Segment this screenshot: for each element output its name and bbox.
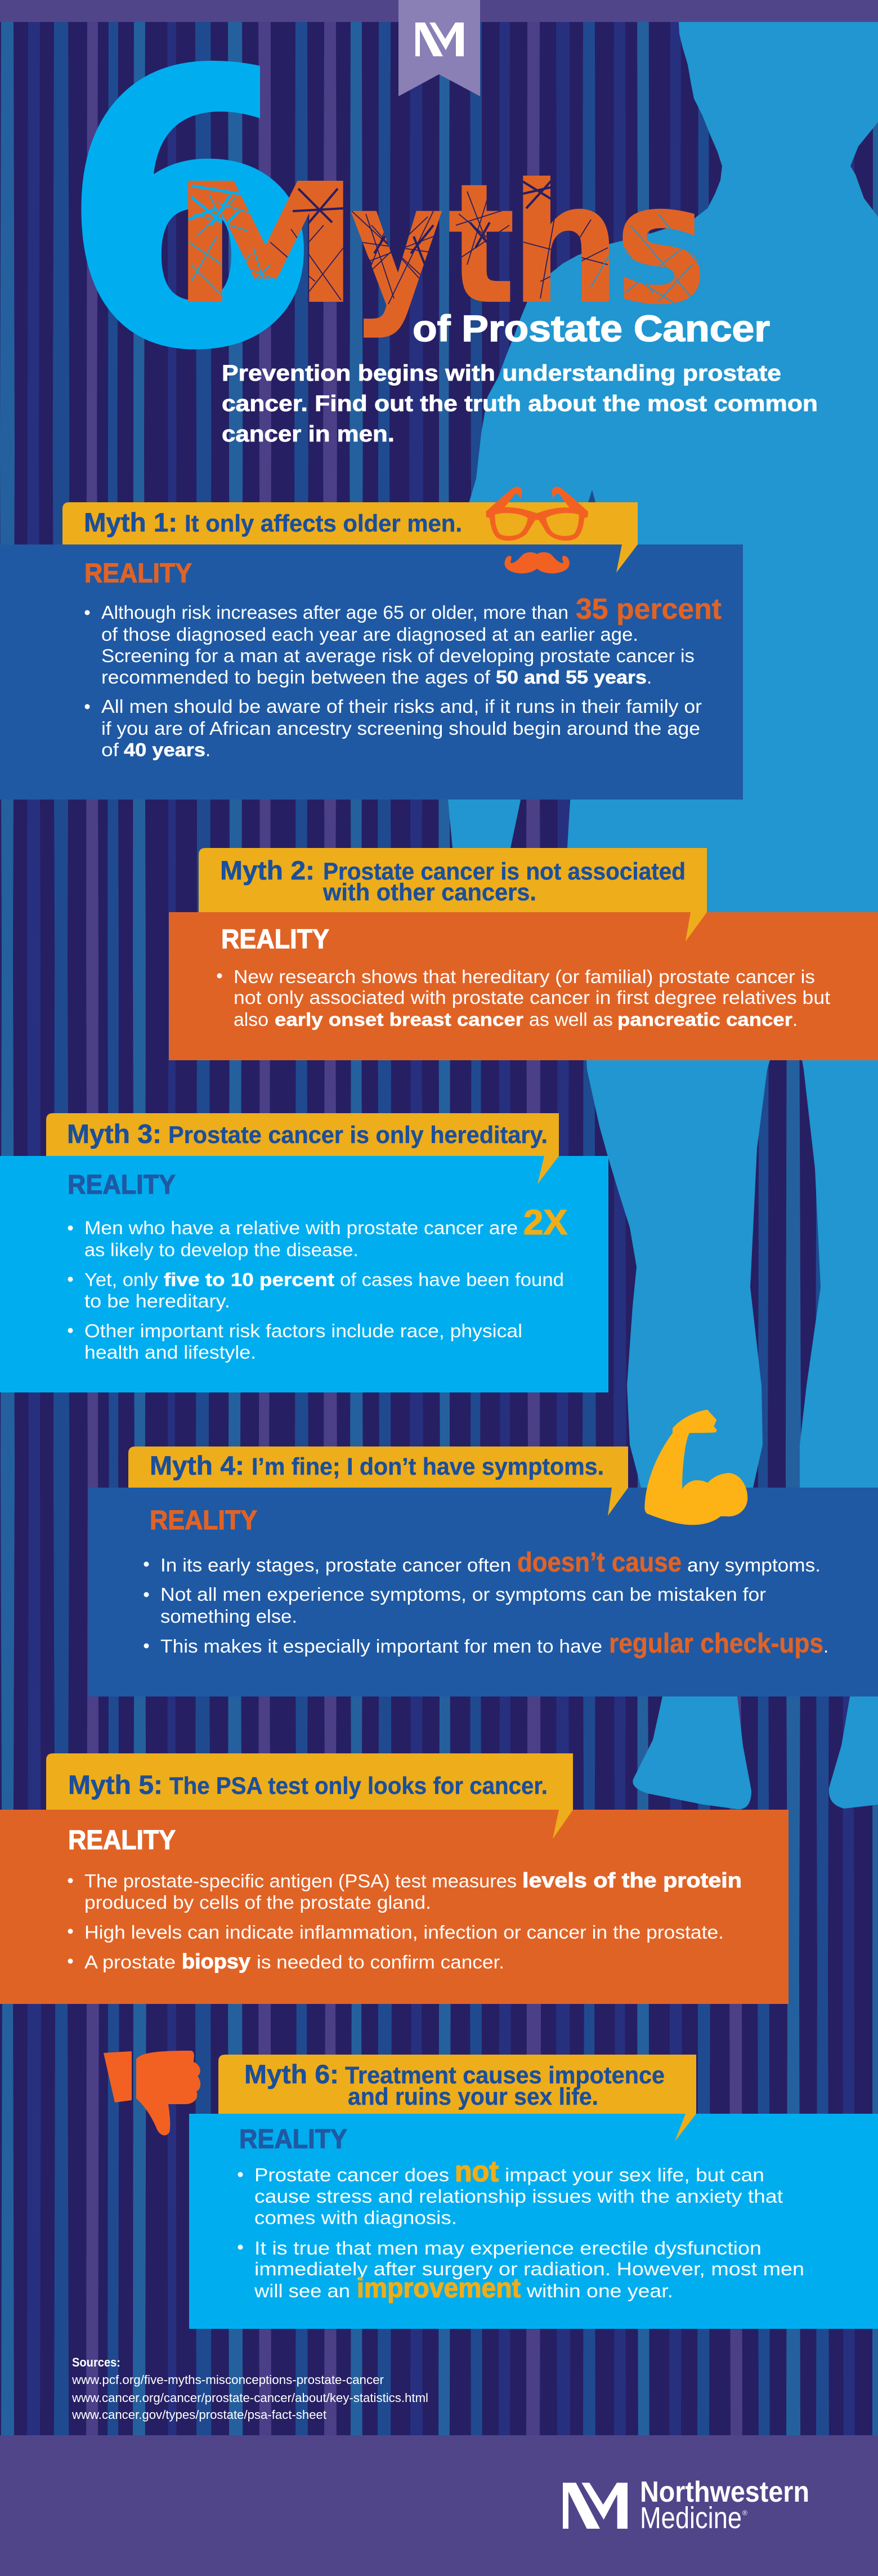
reality text 3: as likely to develop the disease. [84,1239,359,1260]
reality text 4: Not all men experience symptoms, or symptoms can be mistaken for [160,1584,766,1605]
reality text 3: health and lifestyle. [84,1342,256,1363]
sources: www.pcf.org/five-myths-misconceptions-prostate-cancer [71,2373,384,2387]
reality text 5 [68,1869,742,1973]
reality text 5: High levels can indicate inflammation, infection or cancer in the prostate. [84,1922,724,1943]
reality text 5: produced by cells of the prostate gland. [84,1892,431,1913]
myth 5 banner [46,1753,573,1839]
panel: myth 1 [0,486,743,800]
logo wordmark: Medicine [640,2501,742,2535]
reality text 4 [144,1547,828,1659]
title word Myths: s [615,148,707,341]
reality text 6: will see an [254,2280,350,2301]
title word Myths: y [349,148,445,341]
reality text 2: also [234,1009,268,1030]
sources [71,2355,428,2422]
title word Myths [188,176,700,338]
reality text 1: 40 years [124,739,205,760]
myth 6 banner: and ruins your sex life. [348,2083,598,2110]
reality text 1: recommended to begin between the ages of [101,667,491,687]
icon: glasses [486,486,588,541]
reality text 1 [84,593,722,760]
reality text 6: impact your sex life, but can [505,2164,764,2185]
title word Myths: h [510,148,621,341]
sources: www.cancer.gov/types/prostate/psa-fact-sheet [71,2408,326,2422]
intro paragraph: cancer. Find out the truth about the most common [222,391,818,416]
logo mark [563,2483,628,2529]
reality text 4: This makes it especially important for men to have [160,1636,602,1657]
reality text 2: . [792,1009,798,1030]
reality text 2: early onset breast cancer [275,1009,523,1030]
intro paragraph: Prevention begins with understanding prostate [222,361,781,386]
icon: flexed arm [644,1409,747,1525]
reality text 3: Men who have a relative with prostate cancer are [84,1217,518,1238]
ribbon with logo [398,0,480,96]
myth 5 banner: Myth 5: [68,1770,163,1800]
myth 2 banner: with other cancers. [322,879,536,906]
reality box 1 [0,544,743,800]
myth 4 banner [128,1447,628,1516]
logo wordmark: ® [742,2509,747,2517]
myth 1 banner [62,502,638,573]
reality box 3 [0,1156,608,1392]
myth 3 banner: Prostate cancer is only hereditary. [168,1122,548,1149]
reality text 6: It is true that men may experience erectile dysfunction [254,2238,761,2258]
intro paragraph: cancer in men. [222,422,395,447]
top bar [0,0,878,22]
reality heading 1: REALITY [84,559,192,588]
myth 1 banner: It only affects older men. [185,510,462,537]
reality heading 4: REALITY [150,1506,257,1535]
reality heading 6: REALITY [239,2124,347,2154]
panel: myth 2 [169,848,878,1060]
reality text 4: something else. [160,1606,297,1627]
reality text 1: Screening for a man at average risk of developing prostate cancer is [101,645,695,666]
myth 6 banner: Treatment causes impotence [345,2062,665,2089]
reality text 1: Although risk increases after age 65 or older, more than [101,602,568,623]
reality text 1: if you are of African ancestry screening should begin around the age [101,718,700,739]
reality text 5: The prostate-specific antigen (PSA) test measures [84,1870,517,1891]
reality text 1: . [205,739,210,760]
reality text 4: . [823,1636,828,1657]
reality text 1: 35 percent [576,593,722,626]
reality text 4: regular check-ups [609,1628,823,1659]
reality text 3 [68,1203,567,1363]
reality text 3: to be hereditary. [84,1291,230,1311]
myth 3 banner: Myth 3: [67,1119,162,1149]
reality text 1: . [647,667,652,687]
reality text 6 [238,2155,804,2303]
reality text 3: of cases have been found [340,1269,564,1290]
reality text 3: Yet, only [84,1269,159,1290]
reality text 5: biopsy [182,1950,250,1973]
footer bar [0,2435,878,2576]
reality text 6: cause stress and relationship issues with the anxiety that [254,2186,783,2207]
footer logo [563,2476,809,2535]
reality heading 2: REALITY [221,925,329,954]
big number 6: 6 [60,0,322,431]
reality text 6: Prostate cancer does [254,2164,449,2185]
myth 4 banner: Myth 4: [150,1450,244,1480]
myth 1 banner: Myth 1: [84,507,177,537]
reality text 1: of those diagnosed each year are diagnosed at an earlier age. [101,624,638,645]
icon: thumbs down [104,2051,200,2135]
myth 5 banner: The PSA test only looks for cancer. [169,1773,548,1800]
reality box 4 [88,1488,878,1697]
reality box 6 [189,2114,878,2329]
reality text 1: of [101,739,119,760]
title word Myths: M [171,148,361,341]
reality text 4: In its early stages, prostate cancer often [160,1555,511,1575]
sources: www.cancer.org/cancer/prostate-cancer/about/key-statistics.html [71,2391,428,2405]
myth 2 banner [199,848,707,941]
subtitle: of Prostate Cancer [413,307,770,349]
reality text 5: A prostate [84,1952,176,1972]
reality text 4: any symptoms. [687,1555,821,1575]
reality text 6: not [455,2155,499,2188]
myth 2 banner: Myth 2: [220,855,315,885]
title word Myths: t [447,148,516,341]
reality text 3: five to 10 percent [164,1269,334,1290]
reality text 5: levels of the protein [522,1869,742,1892]
intro paragraph [222,361,818,447]
reality text 2: as well as [529,1009,613,1030]
reality heading 3: REALITY [68,1170,176,1200]
reality text 6: within one year. [526,2280,673,2301]
myth 2 banner: Prostate cancer is not associated [323,858,686,885]
reality text 2: pancreatic cancer [617,1009,792,1030]
reality box 2 [169,912,878,1060]
panel: myth 3 [0,1113,608,1392]
logo wordmark: Northwestern [640,2476,809,2508]
myth 6 banner: Myth 6: [244,2059,339,2089]
panel: myth 4 [88,1409,878,1697]
reality text 5: is needed to confirm cancer. [257,1952,504,1972]
panel: myth 5 [0,1753,789,2004]
reality heading 5: REALITY [68,1825,176,1855]
reality text 6: immediately after surgery or radiation. However, most men [254,2258,804,2279]
reality text 4: doesn’t cause [517,1547,682,1578]
sources: Sources: [72,2355,120,2369]
reality text 1: All men should be aware of their risks and, if it runs in their family or [101,696,702,717]
logo wordmark [640,2476,809,2535]
myth 6 banner [218,2055,696,2141]
myth 4 banner: I’m fine; I don’t have symptoms. [252,1453,604,1480]
reality box 5 [0,1810,789,2004]
reality text 6: comes with diagnosis. [254,2207,457,2228]
panel: myth 6 [189,2055,878,2329]
myth 3 banner [46,1113,559,1184]
reality text 2: not only associated with prostate cancer in first degree relatives but [234,987,830,1008]
reality text 1: 50 and 55 years [496,667,647,687]
reality text 3: Other important risk factors include race, physical [84,1320,522,1341]
reality text 2 [217,966,830,1030]
icon: moustache [504,552,570,573]
reality text 2: New research shows that hereditary (or familial) prostate cancer is [234,966,815,987]
reality text 3: 2X [523,1203,567,1242]
reality text 6: improvement [357,2273,521,2303]
man silhouette [448,22,878,1809]
